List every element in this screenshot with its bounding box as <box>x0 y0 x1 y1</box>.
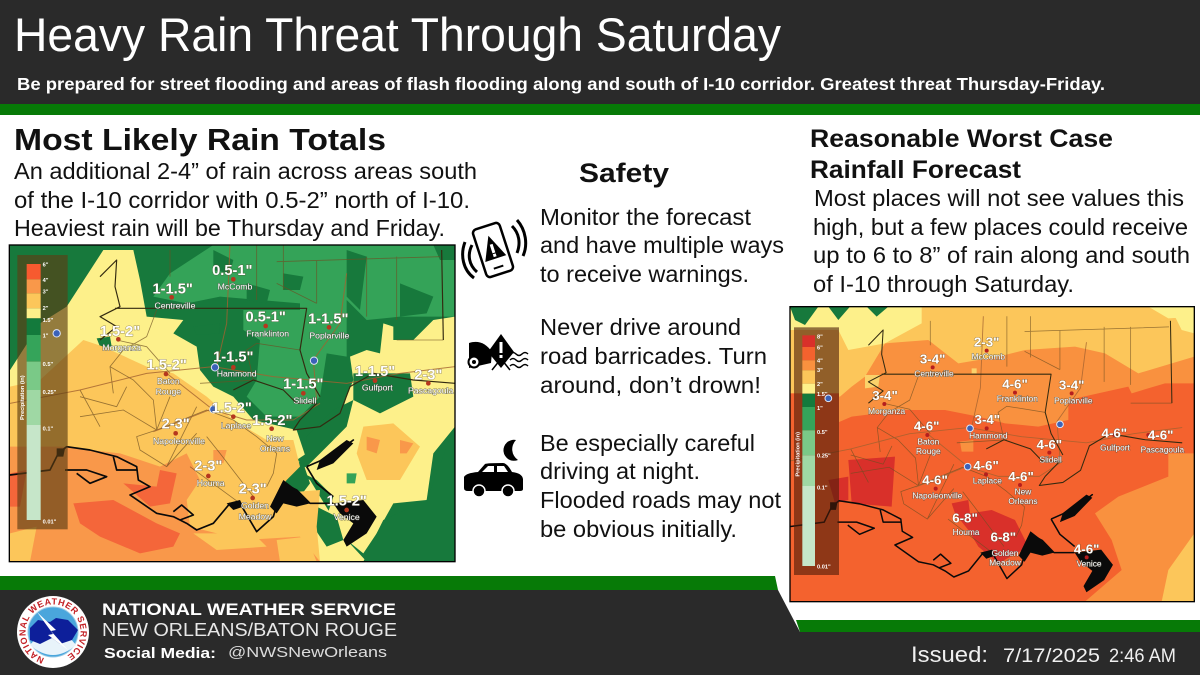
rainfall labels: Morganza <box>102 343 141 353</box>
heading: reasonable worst case <box>810 125 1113 184</box>
rainfall labels: 1-1.5" <box>355 364 395 380</box>
city markers <box>116 277 431 512</box>
text: careful at night: driving at night. <box>540 458 700 484</box>
rainfall labels: Poplarville <box>1054 395 1093 405</box>
legend: precipitation scale: 6" <box>817 345 823 351</box>
legend: precipitation scale: Precipitation (in) <box>20 375 26 420</box>
legend: precipitation scale: 3" <box>817 368 823 374</box>
rainfall labels: 2-3" <box>414 367 442 383</box>
rainfall labels: 4-6" <box>1002 376 1028 391</box>
text: most likely summary <box>14 158 477 241</box>
logo: national weather service: NATIONAL WEATHER SERVICE <box>19 598 87 664</box>
rainfall labels: Pascagoula <box>1141 445 1184 455</box>
rainfall labels: 1-1.5" <box>213 350 254 366</box>
office name: @NWSNewOrleans <box>228 644 387 661</box>
heading: reasonable worst case: Rainfall Forecast <box>810 156 1022 184</box>
legend: precipitation scale: 0.1" <box>43 427 54 433</box>
icon: car at night <box>464 440 523 497</box>
text: never drive around: Never drive around <box>540 314 741 340</box>
office name: NATIONAL WEATHER SERVICE <box>102 600 396 619</box>
rainfall labels: 2-3" <box>162 417 190 433</box>
text: worst case summary: high, but a few places could receive <box>813 214 1188 240</box>
rainfall labels: Houma <box>953 527 980 537</box>
text: careful at night <box>540 430 782 542</box>
text: monitor the forecast <box>540 204 784 287</box>
rainfall labels: 3-4" <box>1059 377 1084 392</box>
rainfall labels: Hammond <box>969 430 1008 440</box>
rainfall labels: Golden <box>241 501 269 511</box>
legend: precipitation scale: 0.5" <box>43 362 54 368</box>
icon: car at flooded barricade <box>468 334 528 370</box>
rainfall labels <box>100 263 453 522</box>
rainfall labels: 1-1.5" <box>283 376 324 392</box>
legend: precipitation scale <box>17 255 68 529</box>
rainfall labels: 0.5-1" <box>212 263 253 279</box>
rainfall labels: 1.5-2" <box>252 413 293 429</box>
rainfall labels: Laplace <box>973 475 1002 485</box>
rainfall labels: Gulfport <box>362 383 393 393</box>
rainfall labels: Gulfport <box>1100 443 1130 453</box>
text: never drive around: around, don’t drown! <box>540 372 761 398</box>
panel: reasonable worst case <box>789 125 1194 602</box>
legend: precipitation scale: 0.01" <box>43 519 57 525</box>
rainfall labels: Venice <box>334 512 360 522</box>
rainfall labels: 2-3" <box>239 481 267 497</box>
legend: precipitation scale: 1" <box>817 406 823 412</box>
text: worst case summary: of I-10 through Saturday. <box>813 271 1074 297</box>
rainfall labels: Centreville <box>914 369 954 379</box>
footer banner <box>0 576 1200 675</box>
map: worst case rainfall <box>789 307 1194 602</box>
issued date: Issued: <box>911 642 988 667</box>
rainfall labels: Baton <box>917 436 940 446</box>
map: most likely rainfall <box>9 245 455 562</box>
legend: precipitation scale: 2" <box>43 306 49 312</box>
legend: precipitation scale: 1.5" <box>817 392 828 398</box>
rainfall labels: 1.5-2" <box>326 493 367 509</box>
city markers <box>882 349 1150 559</box>
text: worst case summary: up to 6 to 8” of rain along and south <box>813 242 1190 268</box>
legend: precipitation scale: 0.25" <box>817 453 831 459</box>
rainfall labels: McComb <box>972 351 1005 361</box>
rainfall labels: 4-6" <box>914 419 939 434</box>
legend: precipitation scale: 4" <box>43 278 49 284</box>
legend: precipitation scale: 0.01" <box>817 565 831 571</box>
rainfall labels: Meadow <box>239 511 272 521</box>
text: never drive around <box>540 314 767 398</box>
interstate shields <box>53 330 318 413</box>
rainfall labels: 4-6" <box>1148 427 1173 442</box>
legend: precipitation scale: 6" <box>43 263 49 269</box>
rainfall labels: Poplarville <box>309 330 349 340</box>
rainfall labels: 4-6" <box>1102 425 1127 440</box>
rainfall labels: McComb <box>218 281 252 291</box>
rainfall labels: Golden <box>992 548 1019 558</box>
rainfall labels: Franklinton <box>246 329 289 339</box>
text: most likely summary: An additional 2-4” of rain across areas south <box>14 158 477 184</box>
rainfall labels: 1.5-2" <box>146 357 187 373</box>
rainfall labels: Slidell <box>1040 454 1062 464</box>
rainfall labels: Franklinton <box>997 394 1038 404</box>
text: monitor the forecast: and have multiple ways <box>540 232 784 258</box>
rainfall labels: Centreville <box>155 300 196 310</box>
legend: precipitation scale: 2" <box>817 382 823 388</box>
legend: precipitation scale <box>794 327 839 575</box>
text: monitor the forecast: Monitor the forecast <box>540 204 752 230</box>
rainfall labels: Pascagoula <box>408 385 453 395</box>
rainfall labels: 4-6" <box>1008 469 1034 484</box>
rainfall labels: 2-3" <box>194 459 222 475</box>
rainfall labels: Orleans <box>260 443 291 453</box>
text: careful at night: Flooded roads may not <box>540 487 782 513</box>
text: worst case summary: Most places will not see values this <box>814 185 1184 211</box>
rainfall labels: Houma <box>197 478 225 488</box>
icon: phone alert <box>463 220 526 278</box>
legend: precipitation scale: 1.5" <box>43 318 54 324</box>
issued date: 7/17/2025 <box>1003 646 1100 667</box>
office name <box>102 600 397 662</box>
rainfall labels: 1.5-2" <box>211 401 252 417</box>
text: monitor the forecast: to receive warnings. <box>540 261 749 287</box>
legend: precipitation scale: 3" <box>43 289 49 295</box>
office name: NEW ORLEANS/BATON ROUGE <box>102 620 397 640</box>
rainfall labels: Laplace <box>221 420 251 430</box>
rainfall labels: Hammond <box>217 369 257 379</box>
rainfall labels: 4-6" <box>1074 541 1099 556</box>
rainfall labels: Rouge <box>156 387 181 397</box>
text: most likely summary: of the I-10 corridor with 0.5-2” north of I-10. <box>14 187 470 213</box>
legend: precipitation scale: 0.25" <box>43 390 57 396</box>
rainfall labels: Napoleonville <box>912 490 963 500</box>
rainfall labels: Orleans <box>1008 496 1038 506</box>
rainfall labels: Napoleonville <box>153 436 205 446</box>
title: Heavy Rain Threat Through Saturday <box>14 8 781 61</box>
text: never drive around: road barricades. Turn <box>540 343 767 369</box>
text: careful at night: be obvious initially. <box>540 516 737 542</box>
rainfall labels: Meadow <box>989 558 1022 568</box>
rainfall labels: Morganza <box>868 406 906 416</box>
issued date <box>911 642 1176 667</box>
rainfall labels: 1-1.5" <box>308 311 349 327</box>
legend: precipitation scale: 0.5" <box>817 430 828 436</box>
legend: precipitation scale: Precipitation (in) <box>796 432 802 477</box>
legend: precipitation scale: 0.1" <box>817 485 828 491</box>
rainfall labels: 6-8" <box>991 530 1016 545</box>
text: careful at night: Be especially careful <box>540 430 755 456</box>
rainfall labels: 3-4" <box>975 412 1000 427</box>
legend: precipitation scale: 1" <box>43 333 49 339</box>
rainfall labels: Venice <box>1076 559 1102 569</box>
rainfall labels: New <box>266 433 284 443</box>
rainfall labels <box>868 335 1184 569</box>
office name: Social Media: <box>104 645 216 662</box>
heading: reasonable worst case: Reasonable Worst Case <box>810 125 1113 153</box>
legend: precipitation scale: 8" <box>817 334 823 340</box>
rainfall labels: Baton <box>157 376 180 386</box>
interstate shields <box>825 395 1063 470</box>
rainfall labels: 3-4" <box>920 351 945 366</box>
rainfall labels: 4-6" <box>973 458 999 473</box>
header banner <box>0 0 1200 115</box>
subtitle: Be prepared for street flooding and areas of flash flooding along and south of I-10 corridor. Greatest threat Thursday-Friday. <box>17 74 1105 94</box>
rainfall labels: 2-3" <box>974 335 999 350</box>
rainfall labels: 1-1.5" <box>152 281 193 297</box>
heading: most likely rain totals: Most Likely Rain Totals <box>14 122 386 157</box>
rainfall labels: Slidell <box>293 395 317 405</box>
heading: safety: Safety <box>579 158 669 188</box>
rainfall labels: New <box>1015 486 1032 496</box>
legend: precipitation scale: 4" <box>817 359 823 365</box>
panel: safety <box>463 158 784 542</box>
rainfall labels: Rouge <box>916 446 941 456</box>
issued date: 2:46 AM <box>1109 646 1176 667</box>
text: most likely summary: Heaviest rain will be Thursday and Friday. <box>14 215 445 241</box>
rainfall labels: 6-8" <box>952 510 978 525</box>
rainfall labels: 0.5-1" <box>245 310 286 326</box>
rainfall labels: 3-4" <box>872 388 898 403</box>
text: worst case summary <box>813 185 1190 297</box>
rainfall labels: 4-6" <box>922 472 948 487</box>
rainfall labels: 1.5-2" <box>100 324 140 340</box>
panel: most likely rain totals <box>9 122 477 562</box>
rainfall labels: 4-6" <box>1037 437 1062 452</box>
